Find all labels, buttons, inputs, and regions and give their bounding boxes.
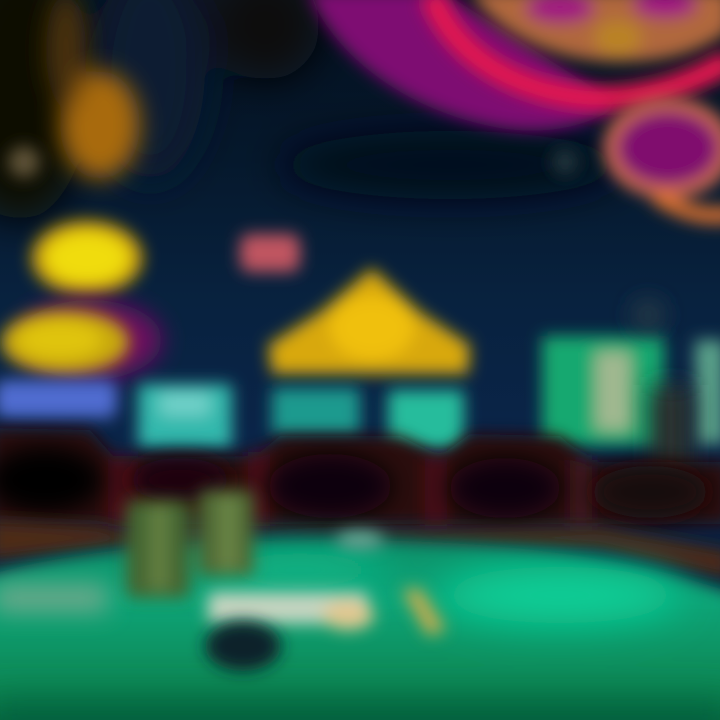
red neon arc bbox=[432, 0, 720, 98]
yellow upper lamp bbox=[31, 220, 143, 296]
magenta ceiling swoosh bbox=[308, 0, 620, 131]
small pale object on the felt bbox=[336, 531, 384, 549]
table rail bbox=[0, 520, 720, 578]
chair shadows bbox=[0, 446, 708, 518]
green felt table bbox=[0, 540, 720, 720]
felt highlights and edge darkening bbox=[0, 552, 720, 720]
shadow figure bbox=[633, 300, 692, 505]
dark ceiling bbox=[0, 0, 620, 220]
yellow lower lamp bbox=[1, 310, 129, 374]
white cards in the center bbox=[208, 592, 374, 630]
blue light strip bbox=[0, 380, 117, 418]
small ceiling lights bbox=[8, 146, 578, 178]
magenta halo behind lower lamp bbox=[18, 300, 162, 380]
pink sign bbox=[240, 234, 300, 272]
ornate purple and gold ceiling medallion bbox=[470, 0, 720, 62]
pale cards on the left bbox=[0, 584, 107, 612]
central golden chandelier bbox=[268, 268, 470, 374]
stacks of chips bbox=[126, 490, 254, 598]
row of chairs bbox=[0, 428, 720, 526]
gold card bbox=[402, 588, 446, 636]
teal screens bbox=[138, 384, 464, 450]
amber ceiling glow bbox=[46, 0, 140, 179]
black chip bbox=[205, 621, 281, 671]
lower ring ornament bbox=[610, 104, 720, 216]
green right screen bbox=[542, 336, 720, 446]
